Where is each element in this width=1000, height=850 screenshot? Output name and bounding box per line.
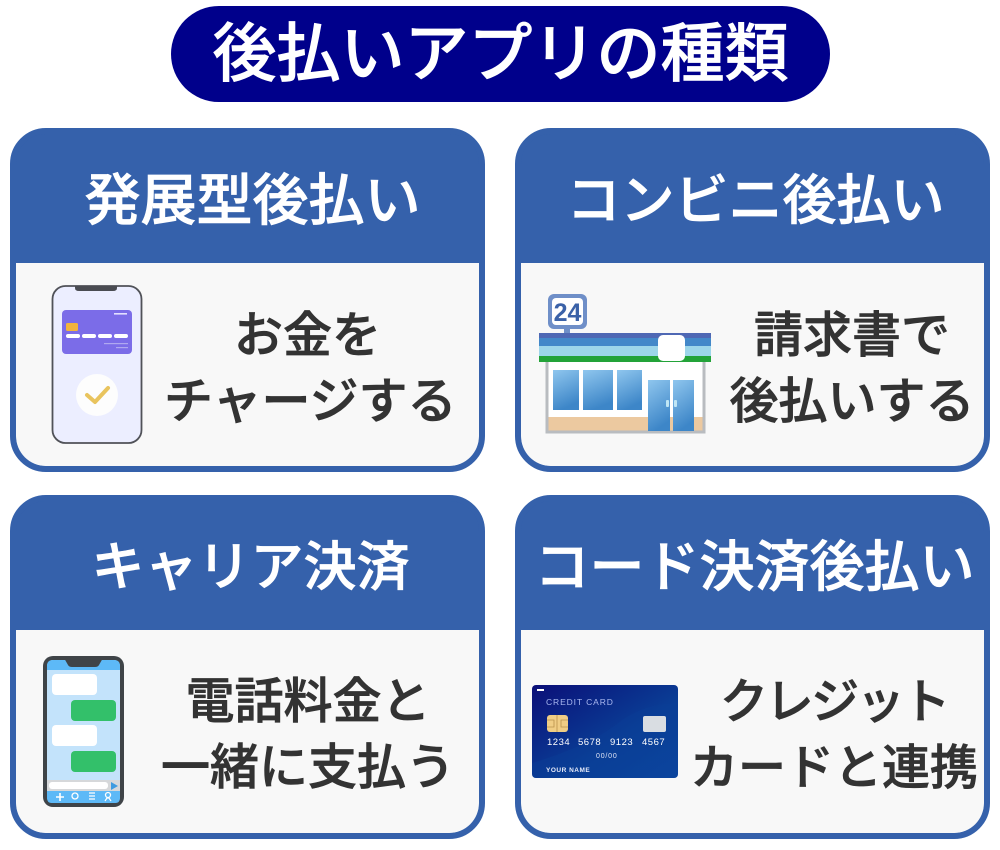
heading: 発展型後払い: 発展型後払い: [84, 169, 420, 232]
text: お金をチャージする: チャージする: [164, 375, 457, 429]
icon: smartphone with messages: [43, 656, 124, 807]
icon: credit card: 00/00: [596, 753, 618, 760]
icon: credit card: 9123: [610, 737, 633, 748]
icon: credit card: 1234: [547, 737, 570, 748]
icon: smartphone with card: [52, 285, 142, 444]
panel body: [521, 630, 984, 833]
text: クレジットカードと連携: クレジット: [720, 676, 948, 729]
text: お金をチャージする: お金を: [234, 309, 381, 363]
text: 電話料金と一緒に支払う: 電話料金と: [185, 675, 430, 729]
text: 電話料金と一緒に支払う: [161, 675, 455, 795]
text: お金をチャージする: [164, 309, 457, 429]
heading: キャリア決済: キャリア決済: [92, 538, 410, 597]
text: 請求書で後払いする: 後払いする: [729, 375, 974, 429]
panel body: [16, 630, 479, 833]
icon: credit card: CREDIT CARD: [546, 697, 614, 707]
icon: credit card: 4567: [642, 737, 665, 748]
panel: 発展型後払い: [10, 128, 485, 472]
title: 後払いアプリの種類: [212, 18, 788, 90]
text: クレジットカードと連携: [690, 676, 978, 795]
icon: convenience store: [539, 294, 711, 434]
heading: コード決済後払い: コード決済後払い: [534, 536, 974, 598]
heading: コンビニ後払い: コンビニ後払い: [566, 171, 944, 231]
text: 請求書で後払いする: 請求書で: [754, 309, 950, 363]
panel: コンビニ後払い: [515, 128, 990, 472]
text: 電話料金と一緒に支払う: 一緒に支払う: [161, 741, 455, 795]
icon: credit card: [532, 685, 678, 778]
icon: credit card: 5678: [578, 737, 601, 748]
icon: credit card: YOUR NAME: [546, 767, 590, 774]
panel: キャリア決済: [10, 495, 485, 839]
title: [171, 6, 830, 102]
panel body: [521, 263, 984, 466]
icon: convenience store: 24: [554, 299, 581, 327]
panel: コード決済後払い: [515, 495, 990, 839]
text: 請求書で後払いする: [729, 309, 974, 429]
text: クレジットカードと連携: カードと連携: [690, 742, 978, 795]
panel body: [16, 263, 479, 466]
